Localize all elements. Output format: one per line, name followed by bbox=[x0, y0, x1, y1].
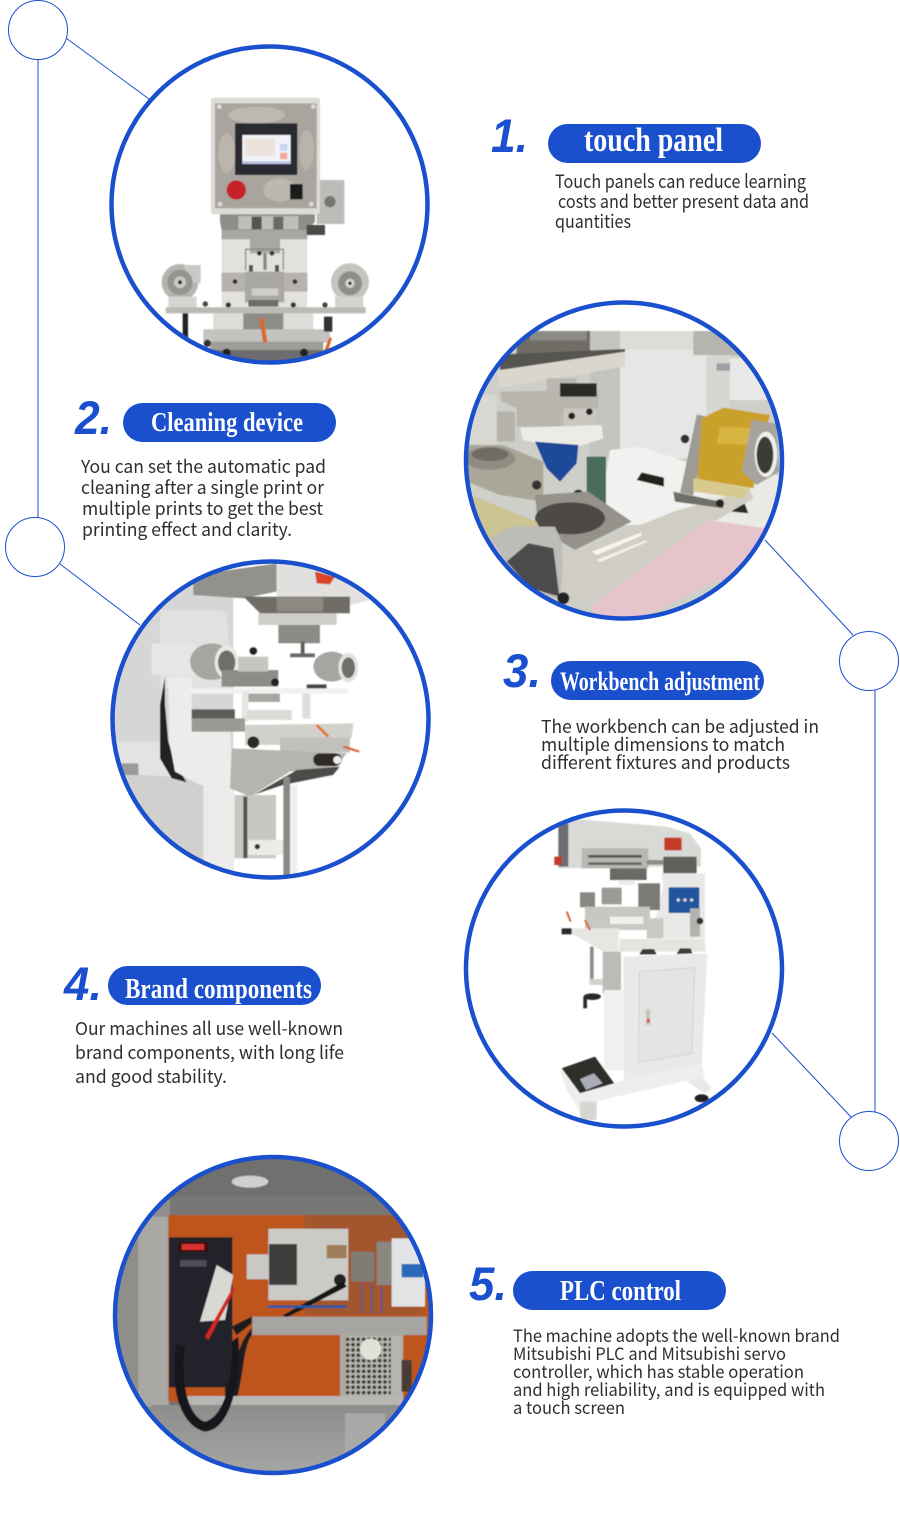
text block 1: Touch panels can reduce learning bbox=[555, 168, 806, 194]
heading 4: number and pill: 4. bbox=[63, 957, 102, 1010]
text block 2: cleaning after a single print or bbox=[81, 474, 325, 500]
heading 3: number and pill: Workbench adjustment bbox=[560, 667, 760, 696]
text block 2: printing effect and clarity. bbox=[82, 516, 292, 542]
text block 2 bbox=[80, 453, 326, 542]
heading 4: number and pill bbox=[63, 957, 321, 1010]
text block 5: Mitsubishi PLC and Mitsubishi servo bbox=[513, 1340, 786, 1365]
heading 3: number and pill: 3. bbox=[503, 644, 541, 697]
text block 5 bbox=[513, 1322, 840, 1419]
photo circle 1: touch panel bbox=[112, 46, 428, 367]
heading 3: number and pill bbox=[503, 644, 764, 700]
text block 4: brand components, with long life bbox=[75, 1039, 344, 1065]
heading 1: number and pill bbox=[491, 109, 761, 163]
heading 2: number and pill: 2. bbox=[74, 391, 112, 444]
heading 2: number and pill bbox=[74, 391, 336, 444]
heading 5: number and pill: 5. bbox=[469, 1257, 507, 1310]
heading 2: number and pill: Cleaning device bbox=[151, 407, 303, 437]
heading 5: number and pill bbox=[469, 1257, 726, 1310]
text block 2: multiple prints to get the best bbox=[82, 495, 323, 521]
text block 3 bbox=[541, 713, 819, 775]
photo circle 5: electrical cabinet bbox=[105, 1150, 438, 1480]
text block 3: multiple dimensions to match bbox=[541, 731, 785, 757]
text block 2: You can set the automatic pad bbox=[80, 453, 326, 479]
text block 1: quantities bbox=[555, 208, 631, 234]
text block 4: and good stability. bbox=[75, 1063, 227, 1089]
text block 4 bbox=[75, 1015, 344, 1089]
heading 1: number and pill: 1. bbox=[491, 109, 528, 162]
text block 1 bbox=[555, 168, 809, 234]
text block 4: Our machines all use well-known bbox=[75, 1015, 343, 1041]
text block 3: different fixtures and products bbox=[541, 749, 790, 775]
photo circle 4: full machine bbox=[466, 810, 782, 1126]
text block 5: The machine adopts the well-known brand bbox=[513, 1322, 840, 1347]
photo circle 2: workbench closeup bbox=[460, 302, 790, 621]
text block 3: The workbench can be adjusted in bbox=[541, 713, 819, 739]
heading 5: number and pill: PLC control bbox=[560, 1275, 681, 1307]
connector lines and nodes: right bbox=[765, 540, 898, 1170]
heading 4: number and pill: Brand components bbox=[125, 973, 312, 1005]
text block 5: a touch screen bbox=[513, 1394, 625, 1419]
text block 1: costs and better present data and bbox=[558, 188, 809, 214]
connector lines and nodes: left upper bbox=[6, 0, 149, 625]
text block 5: controller, which has stable operation bbox=[513, 1358, 804, 1383]
heading 1: number and pill: touch panel bbox=[584, 122, 723, 159]
text block 5: and high reliability, and is equipped with bbox=[513, 1376, 825, 1401]
photo circle 3: side view bbox=[100, 555, 440, 885]
